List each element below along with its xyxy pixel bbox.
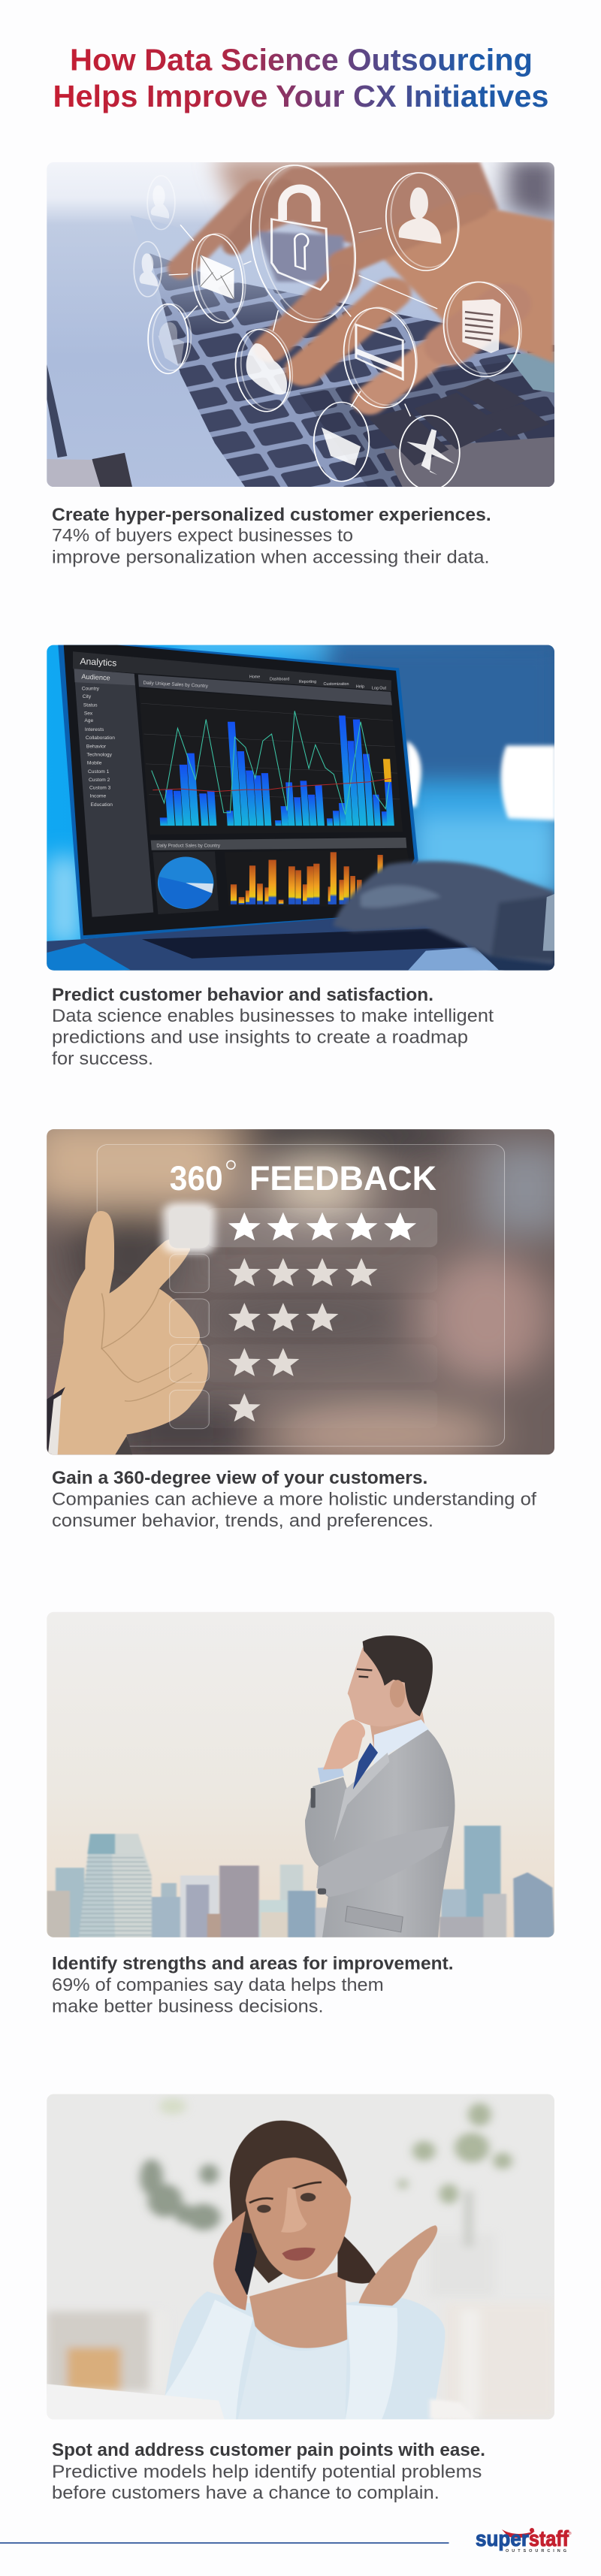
text: predict: predictions and use insights to create a roadmap — [52, 1028, 468, 1048]
text: 360 view: Companies can achieve a more holistic understanding of — [52, 1490, 536, 1510]
analytics sidebar: Age — [84, 718, 93, 723]
title: Helps Improve Your CX Initiatives — [53, 79, 548, 113]
photo: finger pressing five-star 360 feedback rating — [47, 1129, 554, 1454]
analytics sidebar — [74, 656, 153, 917]
main chart: Home — [249, 675, 260, 679]
text: predict: Predict customer behavior and satisfaction. — [52, 985, 433, 1005]
text: predict: for success. — [52, 1049, 153, 1069]
analytics sidebar: Status — [83, 702, 98, 708]
analytics sidebar: Sex — [84, 711, 93, 717]
analytics sidebar: Interests — [85, 727, 104, 732]
right keys and base — [384, 437, 554, 488]
analytics sidebar: Education — [91, 802, 113, 808]
text: strengths — [52, 1953, 454, 2016]
hand — [333, 861, 554, 964]
text: strengths: Identify strengths and areas for improvement. — [52, 1953, 454, 1974]
main chart: Customization — [324, 682, 349, 687]
analytics sidebar: Country — [82, 686, 100, 691]
logo: SuperStaff Outsourcing: super — [476, 2527, 529, 2551]
photo: laptop showing analytics dashboard — [38, 634, 560, 976]
analytics sidebar: Income — [90, 793, 107, 799]
hands — [181, 162, 554, 400]
panel: 360-degree view — [47, 1129, 554, 1530]
panel: hyper-personalized customer experiences — [38, 159, 560, 567]
logo: SuperStaff Outsourcing: ® — [569, 2531, 572, 2536]
man — [305, 1635, 455, 1937]
analytics sidebar: Custom 1 — [88, 769, 110, 775]
glass frame — [97, 1144, 505, 1446]
text: pain points — [52, 2440, 485, 2503]
text: pain points: Spot and address customer pain points with ease. — [52, 2440, 485, 2460]
text: personalization: Create hyper-personalized customer experiences. — [52, 505, 491, 525]
analytics sidebar: Custom 2 — [89, 778, 110, 783]
main chart: Reporting — [299, 680, 316, 684]
icon glyph shapes — [140, 185, 500, 475]
text: personalization — [52, 505, 491, 567]
panel: strengths and areas for improvement — [38, 1608, 560, 2016]
main chart: Log Out — [372, 686, 386, 690]
analytics sidebar: Custom 3 — [89, 786, 111, 791]
logo: SuperStaff Outsourcing: OUTSOURCING — [506, 2549, 566, 2553]
text: strengths: 69% of companies say data helps them — [52, 1975, 384, 1995]
text: 360 view — [52, 1468, 536, 1531]
feedback label — [170, 1160, 436, 1190]
feedback label: FEEDBACK — [249, 1159, 436, 1197]
lower panels: Daily Product Sales by Country — [156, 844, 221, 849]
icon rings — [134, 159, 527, 490]
analytics sidebar: Technology — [86, 753, 113, 758]
bottom-left notch — [92, 453, 132, 488]
photo: businessman thinking before a city skyline — [38, 1608, 560, 1943]
panel: predict customer behavior — [38, 634, 560, 1069]
dark top right — [215, 159, 560, 222]
panel: customer pain points — [38, 2091, 560, 2503]
laptop base and keyboard — [47, 918, 500, 971]
skyline — [47, 1826, 554, 1938]
analytics sidebar: Collaboration — [86, 735, 115, 741]
hand — [47, 1211, 208, 1455]
text: personalization: 74% of buyers expect businesses to — [52, 526, 353, 546]
row bars — [210, 1208, 437, 1247]
analytics sidebar: City — [83, 694, 92, 699]
main chart: Dashboard — [270, 678, 289, 682]
text: pain points: Predictive models help identify potential problems — [52, 2462, 482, 2482]
text: 360 view: Gain a 360-degree view of your customers. — [52, 1468, 427, 1488]
stars — [228, 1213, 416, 1421]
analytics sidebar: Mobile — [87, 760, 102, 766]
lower panels — [151, 838, 410, 914]
text: personalization: improve personalization when accessing their data. — [52, 547, 490, 567]
text: 360 view: consumer behavior, trends, and preferences. — [52, 1511, 433, 1531]
main chart: Help — [356, 684, 364, 689]
logo: SuperStaff Outsourcing — [476, 2527, 572, 2553]
laptop screen — [58, 638, 418, 939]
text: pain points: before customers have a chance to complain. — [52, 2483, 439, 2503]
text: predict: Data science enables businesses to make intelligent — [52, 1006, 494, 1026]
text: predict — [52, 985, 494, 1069]
analytics sidebar: Audience — [81, 673, 110, 682]
logo: SuperStaff Outsourcing: staff — [529, 2527, 569, 2551]
title — [53, 43, 548, 113]
analytics sidebar: Analytics — [80, 656, 117, 669]
title: How Data Science Outsourcing — [70, 43, 533, 77]
main chart — [138, 675, 403, 835]
photo: hands typing on a keyboard with digital icons — [38, 159, 560, 491]
analytics sidebar: Behavior — [86, 744, 107, 749]
photo: frustrated woman on a phone call — [38, 2091, 560, 2422]
woman — [165, 2121, 445, 2419]
laptop — [47, 2384, 225, 2419]
text: strengths: make better business decisions. — [52, 1996, 323, 2016]
feedback label: 360 — [170, 1159, 223, 1197]
main chart: Daily Unique Sales by Country — [143, 681, 209, 689]
footer rule — [0, 2542, 449, 2544]
selection boxes — [170, 1254, 209, 1429]
